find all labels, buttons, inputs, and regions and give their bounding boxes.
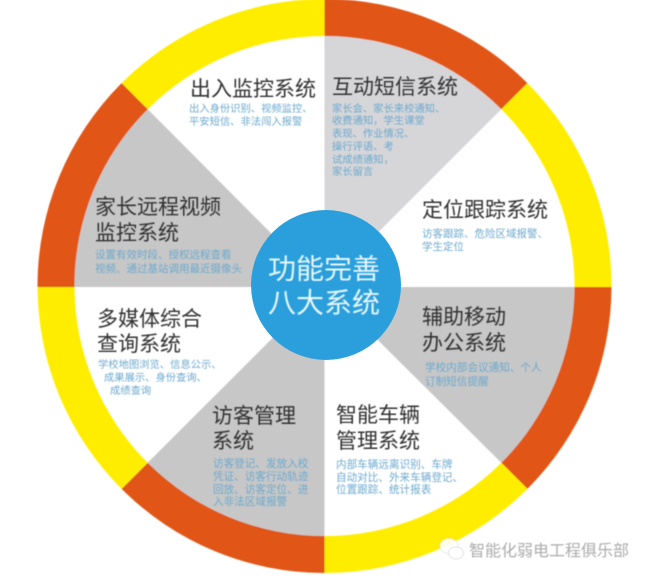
description — [98, 358, 222, 397]
ring: left lower yellow — [38, 287, 148, 489]
heading — [97, 308, 202, 356]
description: 学生定位 — [422, 240, 464, 253]
heading: 管理系统 — [336, 430, 420, 453]
ring: right upper yellow — [501, 83, 612, 287]
description: 凭证、访客行动轨迹 — [213, 470, 309, 483]
description: 订制短信提醒 — [425, 375, 489, 388]
description: 访客跟踪、危险区域报警、 — [422, 227, 548, 240]
panel: 出入监控系统 — [189, 78, 316, 128]
description: 收费通知，学生课堂 — [332, 114, 425, 127]
description — [213, 457, 309, 508]
sector: 家长远程 grey — [74, 109, 324, 287]
heading: 互动短信系统 — [332, 76, 458, 99]
description — [422, 227, 548, 253]
ring: top right orange — [324, 0, 527, 109]
panel: 互动短信系统 — [332, 76, 458, 178]
description — [95, 248, 242, 275]
description: 视频、通过基站调用最近摄像头 — [95, 262, 242, 275]
description: 入非法区域报警 — [213, 495, 288, 508]
panel: 定位跟踪系统 — [422, 199, 548, 253]
description: 出入身份识别、视频监控、 — [189, 102, 313, 115]
description: 访客登记、发放入校 — [213, 457, 309, 470]
heading: 多媒体综合 — [97, 308, 202, 331]
heading: 家长远程视频 — [95, 196, 221, 219]
ring: top left yellow — [122, 0, 324, 109]
heading: 办公系统 — [422, 332, 506, 355]
watermark text: 智能化弱电工程俱乐部 — [469, 542, 629, 560]
panel: 辅助移动办公系统 — [422, 306, 542, 388]
icon: chat bubbles watermark — [440, 538, 464, 559]
description — [189, 102, 313, 128]
heading — [212, 405, 296, 453]
description: 表现、作业情况、 — [332, 127, 414, 140]
description — [332, 102, 445, 178]
sector: 辅助移动 grey — [324, 287, 574, 463]
panel: 访客管理系统 — [212, 405, 309, 508]
panel: 多媒体综合查询系统 — [97, 308, 222, 397]
centre heading: 功能完善 — [268, 254, 380, 284]
description: 学校内部会议通知、个人 — [425, 361, 542, 374]
description: 平安短信、非法闯入报警 — [189, 115, 302, 128]
description: 学校地图浏览、信息公示、 — [98, 358, 222, 371]
sector: 访客管理 grey — [148, 286, 324, 536]
centre heading: 八大系统 — [268, 288, 380, 318]
description: 成果展示、身份查询、 — [104, 371, 207, 384]
description: 家长留言 — [332, 165, 373, 178]
ring: right lower orange — [501, 287, 612, 489]
sector: 互动短信 grey — [324, 36, 501, 286]
description: 位置跟踪、统计报表 — [336, 483, 432, 496]
heading: 智能车辆 — [336, 404, 420, 427]
heading: 访客管理 — [212, 405, 296, 428]
heading: 出入监控系统 — [190, 78, 316, 101]
panel: 家长远程视频监控系统 — [95, 196, 242, 275]
description: 设置有效时段、授权远程查看 — [95, 248, 232, 261]
ring: left upper orange — [37, 83, 148, 287]
heading: 查询系统 — [97, 333, 181, 356]
description: 家长会、家长来校通知、 — [332, 102, 445, 115]
heading: 监控系统 — [95, 222, 179, 245]
heading: 辅助移动 — [422, 306, 506, 329]
ring: bottom left orange — [122, 463, 324, 573]
description — [425, 361, 542, 388]
heading — [336, 404, 420, 453]
description: 内部车辆远离识别、车牌 — [336, 458, 453, 471]
description: 回放、访客定位、进 — [213, 483, 309, 496]
ring: bottom right yellow — [324, 463, 527, 573]
panel: 智能车辆管理系统 — [336, 404, 463, 496]
description: 自动对比、外来车辆登记、 — [336, 471, 463, 484]
heading — [95, 196, 221, 245]
centre circle — [251, 210, 401, 360]
heading: 定位跟踪系统 — [422, 199, 548, 222]
heading: 系统 — [212, 430, 254, 453]
description: 成绩查询 — [110, 384, 151, 397]
description: 试成绩通知， — [332, 153, 394, 166]
heading — [422, 306, 506, 355]
centre heading — [268, 254, 380, 318]
description — [336, 458, 463, 496]
description: 操行评语、考 — [332, 140, 394, 153]
